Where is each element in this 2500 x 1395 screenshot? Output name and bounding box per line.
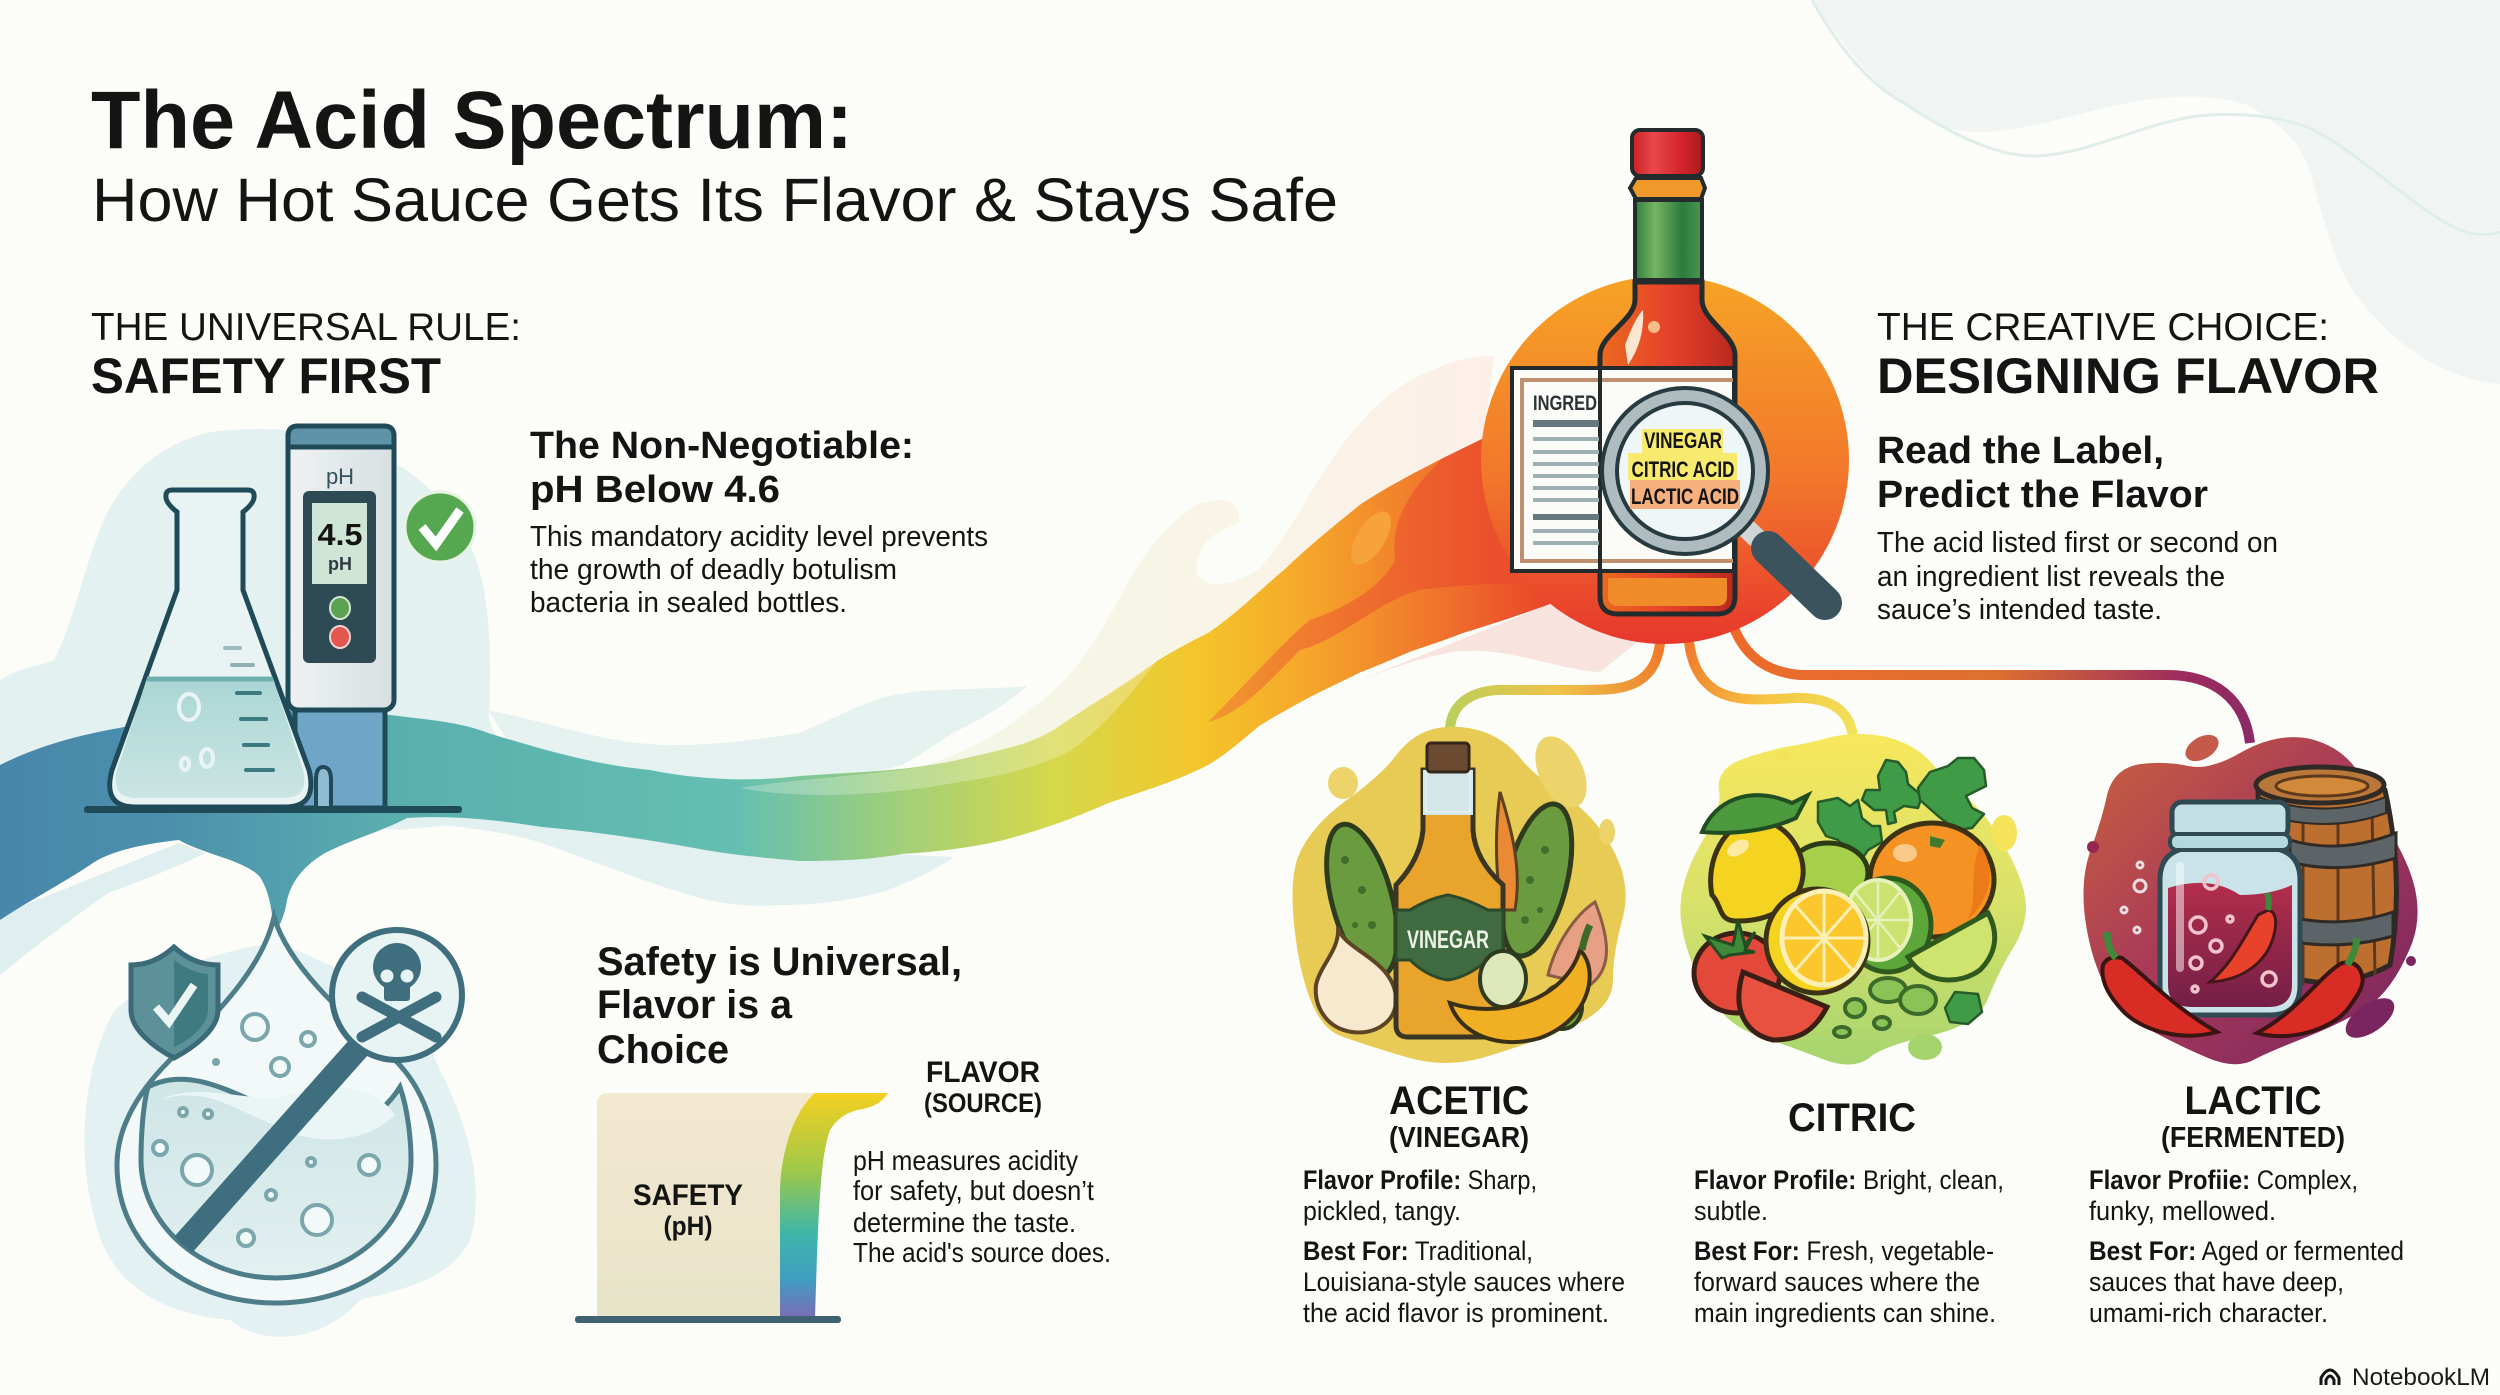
column: acetic: ACETIC [1389,1079,1529,1123]
heading: designing flavor [1877,306,2379,404]
heading: designing flavor: DESIGNING FLAVOR [1877,348,2379,404]
title: The Acid Spectrum: [91,75,853,166]
title: How Hot Sauce Gets Its Flavor & Stays Safe [92,166,1338,234]
flowing acid ribbon [0,438,1560,935]
column: acetic: the acid flavor is prominent. [1303,1298,1609,1328]
lime-yellow blob [1686,740,2020,1058]
icon: magnifying glass: CITRIC ACID [1632,457,1734,482]
heading: safety first: SAFETY FIRST [91,348,441,404]
slash bar [183,1047,359,1245]
text block: pH below 4.6: This mandatory acidity level prevents [530,521,988,553]
orange [1870,823,1994,937]
flavor label: FLAVOR [926,1056,1040,1089]
column: acetic [1303,1079,1625,1328]
connector: to citric [1689,642,1853,737]
column: lactic: Best For: Aged or fermented [2089,1236,2404,1266]
column: lactic: sauces that have deep, [2089,1267,2344,1297]
pale left band under ribbon [0,843,206,975]
lime half [1845,878,1931,972]
text block: safety is universal: Flavor is a [597,983,793,1027]
icon: green check badge [405,492,475,562]
pale lower wash of the ribbon [401,815,954,906]
icon: shield with check [131,947,218,1058]
icon: pH meter: 4.5 [318,517,362,552]
tomato wedge [1739,972,1827,1040]
column: lactic: Flavor Profiie: Complex, [2089,1165,2358,1195]
icon: magnifying glass [1602,388,1825,603]
liquid bowl [141,1079,411,1278]
icon: skull and crossbones [332,930,462,1060]
text block: pH measures acidity: for safety, but doesn’t [853,1175,1094,1206]
column: acetic: Flavor Profile: Sharp, [1303,1165,1537,1195]
red-orange band [1208,438,1560,722]
column: citric [1694,1096,2004,1328]
text block: read the label: Read the Label, [1877,430,2164,472]
icon: pH meter: pH [328,554,352,574]
text block: pH measures acidity: determine the taste. [853,1207,1076,1238]
flask and pH meter on shelf [84,426,475,813]
flavor label [924,1056,1042,1118]
pale halo behind flask and meter [0,429,700,830]
teardrop outer ring [117,917,436,1303]
pink radish [1548,902,1606,985]
carrot [1496,792,1517,910]
text block: safety is universal: Safety is Universal, [597,940,962,984]
heading: safety first: THE UNIVERSAL RULE: [91,306,521,349]
column: citric: subtle. [1694,1196,1768,1226]
column: acetic: pickled, tangy. [1303,1196,1461,1226]
background swoosh: top right [1812,0,2500,384]
hot sauce bottle, ingredient label and magnifier [1481,130,1849,644]
column: citric: CITRIC [1788,1096,1916,1140]
tomato [1694,920,1780,1013]
lactic illustration: fermentation jar, barrel and chili peppers [2087,729,2416,1058]
text block: pH below 4.6 [530,425,988,619]
text block: pH below 4.6: The Non-Negotiable: [530,425,914,467]
safety label: SAFETY [633,1179,743,1212]
text block: pH measures acidity: pH measures acidity [853,1145,1078,1176]
yellow blob [1298,733,1620,1057]
onion [1316,927,1396,1032]
cucumbers [1313,797,1585,983]
column: acetic: Louisiana-style sauces where [1303,1267,1625,1297]
chart: safety vs flavor bars [575,1056,1042,1323]
pale blob [85,943,476,1337]
icon: vinegar bottle: VINEGAR [1407,926,1489,954]
safety label: (pH) [664,1211,712,1241]
text block: read the label [1877,430,2278,626]
maroon blob [2089,743,2412,1058]
bubbles [153,1014,379,1246]
baseline [575,1316,841,1323]
pale upper wash of the ribbon [488,686,1027,800]
column: acetic: Best For: Traditional, [1303,1236,1533,1266]
icon: hot sauce bottle [1600,130,1735,614]
lime [1788,843,1868,903]
heading: designing flavor: THE CREATIVE CHOICE: [1877,306,2329,349]
orange sun disc [1481,276,1849,644]
safety bar [597,1093,815,1318]
column: citric: forward sauces where the [1694,1267,1980,1297]
icon: magnifying glass: VINEGAR [1644,428,1722,453]
column: citric: main ingredients can shine. [1694,1298,1996,1328]
text block: pH below 4.6: bacteria in sealed bottles. [530,587,847,619]
icon: wooden barrel [2256,767,2396,985]
flavor rainbow bar [780,1093,888,1318]
text block: read the label: an ingredient list reveals the [1877,561,2225,593]
column: acetic: (VINEGAR) [1389,1122,1529,1154]
connector: to acetic [1450,643,1660,728]
citric illustration: citrus and herbs [1686,740,2020,1060]
column: lactic [2089,1079,2404,1328]
green chunks [1834,978,1936,1037]
icon: chili peppers [2102,932,2363,1036]
text block: pH measures acidity [853,1145,1111,1268]
column: lactic: (FERMENTED) [2161,1122,2345,1154]
title [91,75,1338,234]
text block: pH below 4.6: pH Below 4.6 [530,469,780,511]
lime wedge [1908,913,1995,980]
column: lactic: funky, mellowed. [2089,1196,2276,1226]
icon: fermentation jar [2121,802,2300,1015]
text block: read the label: The acid listed first or second on [1877,527,2278,559]
heading: safety first [91,306,521,404]
lemon and leaf [1702,795,1808,921]
flavor label: (SOURCE) [924,1088,1042,1118]
pale pink haze below ribbon [1360,600,1640,680]
text block: read the label: Predict the Flavor [1877,474,2208,516]
icon: erlenmeyer flask [110,490,311,807]
text block: pH measures acidity: The acid's source does. [853,1237,1111,1268]
pale cream wash above ribbon [902,356,1494,790]
text block: safety is universal [597,940,962,1072]
column: lactic: umami-rich character. [2089,1298,2328,1328]
icon: vinegar bottle [1396,743,1503,1037]
safety drop icon: teardrop vessel, bubbles, shield and skull [85,917,476,1337]
connector: to lactic [1734,628,2250,743]
safety label [633,1179,743,1241]
column: citric: Flavor Profile: Bright, clean, [1694,1165,2004,1195]
watermark: NotebookLM: NotebookLM [2352,1364,2490,1391]
pale top band [740,661,1157,795]
text block: read the label: sauce’s intended taste. [1877,594,2162,626]
column: lactic: LACTIC [2184,1079,2322,1123]
ingredient label card [1512,368,1734,571]
icon: cilantro herbs [1818,758,1986,1024]
shelf line [84,806,462,813]
ingredient label card: INGRED [1533,392,1597,415]
column: citric: Best For: Fresh, vegetable- [1694,1236,1994,1266]
text block: pH below 4.6: the growth of deadly botulism [530,554,897,586]
lemon slice [1766,889,1868,993]
icon: pH meter [288,426,394,808]
text block: safety is universal: Choice [597,1028,729,1072]
acetic illustration: vinegar bottle and vegetables [1298,728,1620,1057]
icon: pH meter: pH [326,464,354,489]
cucumber slices and yellow pepper [1480,951,1526,1007]
icon: magnifying glass: LACTIC ACID [1631,484,1739,509]
